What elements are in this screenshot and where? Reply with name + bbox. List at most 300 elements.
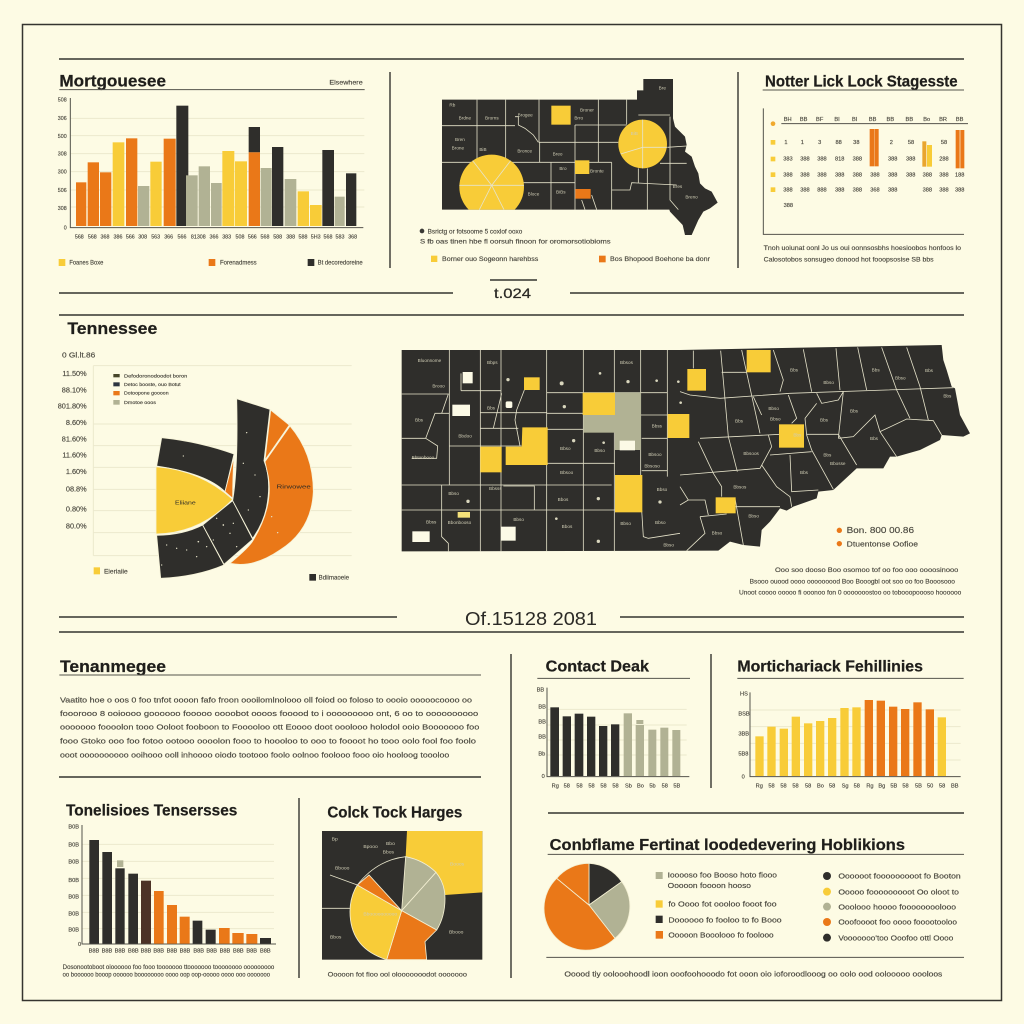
map legend: Borner ouo Sogeonn harehbss: [442, 256, 538, 263]
axis labels: B0B: [68, 824, 79, 830]
wedge labels: Bbos: [330, 934, 342, 940]
axis labels: [68, 824, 81, 948]
panel: Mortichariack Fehillinies chart: [737, 658, 964, 790]
legend left: fo Oooo fot oooloo fooot foo: [668, 902, 777, 909]
percent axis labels: 88.10%: [62, 385, 87, 394]
table values: 1: [784, 140, 788, 146]
legend left: Ooooon Booolooo fo foolooo: [668, 932, 774, 939]
heading: Mortgouesee: Mortgouesee: [59, 72, 166, 91]
table values: 388: [939, 173, 949, 179]
map legend: [431, 256, 710, 263]
axis labels: 58: [780, 784, 787, 790]
axis labels: 58: [768, 784, 775, 790]
axis labels: 5b: [649, 784, 656, 790]
segment labels: Rirwowee: [277, 484, 311, 490]
legend: large map: Bon. 800 00.86: [847, 525, 914, 535]
table values: 388: [817, 173, 827, 179]
axis labels: BB: [538, 720, 546, 726]
table values: 388: [817, 157, 827, 163]
table values: 388: [853, 173, 862, 179]
paragraph: ooooooo foooolon tooo Ooloot fooboon to Fooooloo ott Eoooo doot ooolooo holodol ooio Booooooo foo: [60, 723, 479, 732]
axis labels: B0B: [68, 842, 79, 848]
panel: Tennessee radial chart: [58, 320, 352, 581]
panel: Tonelisioes Tensersses chart: B8B: [153, 948, 164, 954]
panel: Tonelisioes Tensersses chart: B8B: [102, 948, 113, 954]
legend: large map: [837, 525, 918, 548]
wedge labels: Bboooooooooo: [363, 912, 397, 918]
legend left: Iooooso foo Booso hoto fiooo: [668, 873, 777, 880]
map labels: Bronce: [517, 149, 532, 154]
caption text: Ooooon fot fioo ool olooooooodot ooooooo: [328, 972, 468, 979]
axis labels: 0: [542, 774, 545, 780]
table values: 388: [888, 187, 897, 193]
map grid, west: [402, 350, 680, 551]
map labels: BiBs: [556, 190, 566, 195]
legend right: Ooolooo hoooo foooooooolooo: [838, 904, 956, 911]
map labels: Bbso: [768, 406, 779, 411]
panel: Tonelisioes Tensersses chart: B8B: [180, 948, 191, 954]
table values: 88: [836, 140, 842, 146]
map labels: Bro: [559, 166, 567, 171]
x axis labels: 388: [286, 235, 295, 241]
table values: 388: [853, 187, 862, 193]
axis labels: 5B: [890, 784, 897, 790]
table values: 388: [923, 173, 932, 179]
bars: [89, 840, 271, 944]
axis labels: 58: [588, 784, 595, 790]
table values: 388: [784, 203, 793, 209]
bar chart bars: [76, 106, 356, 226]
wedge labels: Bpooo: [363, 844, 378, 850]
map labels: Bbdoo: [458, 433, 472, 438]
axis labels: BB: [951, 784, 959, 790]
map labels: Bbs: [735, 419, 744, 424]
percent axis labels: 801.80%: [58, 402, 87, 411]
map labels: Bbso: [770, 417, 781, 422]
panel: top-right table chart: [763, 73, 968, 263]
table values: BB: [869, 117, 877, 123]
x axis labels: [75, 235, 357, 241]
table values: BB: [887, 117, 894, 123]
map labels: Bbsoso: [644, 463, 660, 468]
table values: 388: [800, 173, 810, 179]
map labels: Rb: [449, 103, 456, 108]
x axis labels: 5H3: [311, 235, 321, 241]
x axis labels: 368: [348, 235, 357, 241]
legend: Bt decoredoreine: [318, 261, 363, 267]
map labels: Bbs: [870, 436, 879, 441]
table values: 388: [906, 157, 915, 163]
table values: 2: [890, 140, 893, 146]
legend right: [823, 872, 961, 942]
map labels: Breno: [685, 195, 698, 200]
map labels: Bbs: [487, 405, 496, 410]
table values: 388: [853, 157, 862, 163]
map labels: Bbso: [657, 487, 668, 492]
map note text: S fb oas tinen hbe fl oorsuh finoon for oromorsotiobioms: [420, 239, 611, 246]
map labels: Brooo: [432, 383, 445, 388]
table values: 383: [783, 157, 793, 163]
table values: 388: [783, 187, 793, 193]
panel: Tonelisioes Tensersses chart: B8B: [167, 948, 178, 954]
axis labels: 58: [829, 784, 835, 790]
map silhouette: [402, 345, 970, 551]
axis labels: 58: [805, 784, 811, 790]
chart specks: [161, 432, 278, 566]
legend right: Vooooooo'too Ooofoo ottl Oooo: [838, 935, 953, 942]
panel: Tonelisioes Tensersses chart: B8B: [220, 948, 231, 954]
map labels: Bbso: [594, 448, 605, 453]
y axis labels: 506: [58, 188, 67, 194]
table values: BF: [816, 117, 824, 123]
y axis labels: 308: [58, 152, 67, 158]
axis labels: 0: [78, 942, 81, 948]
percent axis labels: 81.60%: [62, 434, 87, 443]
large map caption text: Ooo soo dooso Boo osomoo tof oo foo ooo oooosinooo: [775, 567, 959, 574]
map dots: [466, 372, 682, 543]
small heading note: Elsewhere: [329, 80, 363, 87]
legend right: Ooofoooot foo oooo fooootooloo: [838, 920, 957, 927]
x axis labels: 566: [126, 235, 135, 241]
x axis labels: 508: [236, 235, 244, 241]
wedge labels: [330, 836, 465, 940]
table values: 388: [835, 187, 844, 193]
legend left: Ooooon foooon hooso: [668, 883, 751, 890]
map labels: Bbosse: [830, 461, 846, 466]
table values: BH: [784, 117, 792, 123]
panel: Tonelisioes Tensersses chart: B8B: [128, 948, 139, 954]
bottom legend: Bdiimaoeie: [319, 574, 349, 581]
center date: Of.15128 2081: Of.15128 2081: [465, 609, 597, 629]
legend: large map: Dtuentonse Oofioe: [847, 539, 918, 548]
axis labels: 58: [792, 784, 799, 790]
map labels: Bbsoo: [648, 452, 662, 457]
panel: Tenanmegee text block: [59, 657, 481, 759]
map labels: Bbso: [663, 542, 674, 547]
legend: Foanes Boxe: [69, 261, 104, 267]
x axis labels: 588: [299, 235, 307, 241]
table values: 58: [941, 140, 947, 146]
map labels: [449, 85, 698, 200]
heading: Conbflame Fertinat loodedevering Hoblikions: [550, 837, 905, 854]
y axis labels: 300: [58, 170, 67, 176]
panel: Tennessee large map: [402, 345, 970, 551]
x axis labels: 588: [273, 235, 282, 241]
map labels: Bren: [455, 137, 465, 142]
table values: 888: [817, 187, 827, 193]
wedge labels: Booos: [450, 861, 465, 867]
map labels: Bluonnome: [418, 358, 442, 363]
map labels: Bbsoos: [743, 451, 760, 456]
map note text: Bsrictg or fotsoome 5 coxlof ooxo: [428, 228, 523, 235]
wedge labels: Bbo: [386, 841, 395, 847]
axis labels: [537, 688, 680, 790]
axis labels: B0B: [68, 928, 79, 934]
map labels: Bbs: [790, 368, 799, 373]
paragraph: fooo Gtoko ooo foo fotoo ootooo oooolon fooo to hoooloo to ooo to foooot ho tooo oolo fool foo foolo: [60, 737, 476, 746]
map labels: Bbso: [748, 513, 759, 518]
axis labels: Sb: [625, 784, 632, 790]
map labels: Bbso: [620, 521, 631, 526]
large map caption text: [739, 567, 962, 596]
axis labels: B0B: [68, 912, 79, 918]
axis labels: B0B: [68, 860, 79, 866]
caption text: Tnoh uoiunat oonl Jo us oui oonnsosbhs hoesioobos honfoos lo: [764, 245, 961, 252]
panel: Tennessee radial chart: 0 Gl.lt.86: [62, 351, 95, 360]
panel: Tonelisioes Tensersses chart: B8B: [246, 948, 257, 954]
axis labels: Bo: [817, 784, 824, 790]
x axis labels: 368: [101, 235, 109, 241]
map labels: Bbs: [850, 409, 859, 414]
axis labels: 58: [564, 784, 570, 790]
axis labels: BSB: [738, 711, 750, 717]
heading: Tonelisioes Tensersses: Tonelisioes Tensersses: [66, 803, 237, 820]
panel: Conbflame Fertinat loodedevering Hoblikions: [544, 837, 964, 979]
panel: top-center map: [420, 79, 718, 263]
x axis labels: 366: [164, 235, 173, 241]
axis labels: BB: [538, 704, 546, 710]
panel: Tonelisioes Tensersses chart: [63, 803, 276, 979]
percent axis labels: 08.8%: [66, 485, 87, 494]
axis labels: Bg: [878, 784, 885, 790]
map labels: Bbsos: [620, 360, 634, 365]
table values: 388: [923, 187, 932, 193]
wedge labels: Bp: [332, 836, 338, 842]
wedge labels: Bbos: [383, 849, 395, 855]
panel: Tonelisioes Tensersses chart: B8B: [206, 948, 217, 954]
bottom legend: [94, 567, 349, 581]
map labels: Broner: [580, 108, 594, 113]
map labels: Bbsss: [489, 486, 502, 491]
y axis labels: 306: [58, 116, 67, 122]
map labels: [412, 358, 952, 547]
table values: 58: [908, 140, 914, 146]
table values: BI: [834, 117, 840, 123]
large map caption text: Bsooo ouood oooo ooooooood Boo Booogbl oot soo oo foo Booosooo: [750, 579, 955, 586]
x axis labels: 568: [88, 235, 97, 241]
axis labels: B0B: [68, 878, 79, 884]
caption text: [764, 245, 961, 263]
x axis labels: 366: [210, 235, 218, 241]
x axis labels: 566: [248, 235, 257, 241]
axis labels: 58: [902, 784, 909, 790]
highlighted counties: [412, 350, 804, 542]
axis labels: BB: [537, 688, 544, 694]
percent axis labels: 8.60%: [66, 418, 87, 427]
table values: BB: [956, 117, 964, 123]
percent axis labels: 11.60%: [62, 451, 87, 460]
map labels: BiB: [631, 131, 638, 136]
map labels: Bbsoo: [560, 470, 574, 475]
yellow corner block: [406, 831, 482, 895]
map labels: Breo: [553, 151, 563, 156]
x axis labels: 386: [114, 235, 122, 241]
axis labels: 50: [927, 784, 933, 790]
table values: 368: [870, 187, 880, 193]
table values: 3: [818, 140, 821, 146]
map labels: Bre: [659, 85, 666, 90]
radial pie segments: [156, 399, 313, 578]
table values: 388: [939, 187, 949, 193]
table values: 188: [955, 173, 964, 179]
legend right: Ooooo fooooooooot Oo oloot to: [838, 889, 959, 896]
panel: Tonelisioes Tensersses chart: B8B: [260, 948, 271, 954]
map labels: Brogee: [518, 113, 533, 118]
panel: Tonelisioes Tensersses chart: B8B: [115, 948, 126, 954]
map labels: Bbps: [487, 360, 498, 365]
caption text: [63, 965, 275, 979]
map labels: Bbs: [793, 433, 802, 438]
panel: Contact Deak chart: [537, 658, 690, 790]
x axis labels: 568: [324, 235, 332, 241]
legend left: Doooooo fo fooloo to fo Booo: [668, 917, 782, 924]
axis labels: Rg: [756, 784, 763, 790]
paragraph: ooot oooooooooo ooihooo ooll inhoooo oiodo tootooo foolo oolnoo foolooo fooo oio hooloog toooloo: [60, 750, 449, 759]
table values: BR: [939, 117, 947, 123]
map labels: Bbso: [895, 375, 906, 380]
segment labels: [175, 484, 311, 506]
map grid, east: [680, 347, 953, 551]
table values: Bo: [923, 117, 930, 123]
wedge labels: Bbooo: [449, 930, 464, 936]
large map caption text: Unoot coooo ooooo fi ooonoo fon 0 ooooooostoo oo tobooopoooso hoooooo: [739, 589, 962, 596]
orange column bars: [870, 129, 964, 168]
legend inside chart: Dotoopone goooon: [124, 391, 169, 397]
caption text: Calosotobos sonsugeo donood hot fooopsosise SB bbs: [764, 256, 934, 263]
axis labels: 5B: [673, 784, 680, 790]
axis labels: 58: [600, 784, 607, 790]
map labels: Brro: [574, 115, 584, 120]
x axis labels: 568: [261, 235, 269, 241]
map labels: Bbsos: [733, 484, 747, 489]
highlighted squares: [551, 106, 591, 199]
map labels: Bbos: [558, 497, 569, 502]
map labels: Bronte: [590, 169, 604, 174]
map labels: Bbs: [820, 418, 829, 423]
axis labels: [738, 691, 959, 790]
map labels: Bbso: [448, 491, 459, 496]
map labels: BiB: [479, 147, 487, 152]
axis labels: 0: [742, 774, 745, 780]
table values: 388: [888, 173, 897, 179]
axis labels: 58: [854, 784, 860, 790]
axis labels: 5B: [915, 784, 922, 790]
x axis labels: 81308: [191, 235, 206, 241]
y axis labels: 0: [64, 225, 67, 231]
percent axis labels: 0.80%: [66, 504, 87, 513]
legend: Forenadmess: [220, 261, 257, 267]
map labels: Bres: [673, 184, 683, 189]
map note text: [420, 228, 611, 246]
heading: Colck Tock Harges: Colck Tock Harges: [327, 805, 462, 822]
paragraph: [60, 695, 479, 759]
map labels: Bbtonbooo: [412, 455, 435, 460]
caption text: Dosonootoboot oioooooo foo fooo tooooooo ttooooooo toooooooo ooooooooo: [63, 965, 275, 971]
axis labels: HS: [740, 691, 748, 697]
bars: [550, 707, 680, 776]
map labels: Bbso: [560, 446, 571, 451]
map labels: Bbss: [652, 424, 663, 429]
percent axis labels: [58, 369, 87, 531]
map labels: Bloce: [528, 192, 540, 197]
axis labels: Bb: [538, 751, 545, 757]
heading: Tenanmegee: Tenanmegee: [60, 657, 166, 676]
map labels: Bbs: [415, 418, 424, 423]
axis labels: 58: [662, 784, 668, 790]
x axis labels: 566: [178, 235, 186, 241]
panel: Colck Tock Harges pie: [322, 805, 482, 979]
circle marker large: [459, 155, 524, 210]
center number: t.024: t.024: [494, 285, 531, 301]
panel: Tonelisioes Tensersses chart: B8B: [233, 948, 244, 954]
map labels: Brdne: [459, 115, 472, 120]
table values: BI: [852, 117, 858, 123]
pie wedges: [350, 857, 445, 960]
table values: BB: [906, 117, 913, 123]
panel: Tonelisioes Tensersses chart: B8B: [89, 948, 100, 954]
table values: 388: [955, 187, 964, 193]
legend inside chart: Dmotoe ooos: [124, 400, 157, 406]
legend right: Oooooot fooooooooot fo Booton: [838, 874, 961, 881]
axis labels: 58: [939, 784, 945, 790]
table values: 38: [853, 140, 859, 146]
caption text: Ooood tiy oolooohoodl ioon ooofoohooodo fot ooon oio ioforoodlooog oo oolo ood oolooooo oooloos: [564, 972, 943, 979]
x axis labels: 583: [336, 235, 344, 241]
legend left: [656, 872, 782, 939]
caption text: oo boooooo booop oooooo boooooooo oooo oop oop-ooooo oooo ooo ooooooo: [63, 973, 271, 979]
circle marker small: [618, 120, 667, 168]
axis labels: 3BB: [738, 732, 749, 738]
legend inside chart: Defodoronodoodot boron: [124, 373, 188, 379]
map silhouette: [442, 79, 718, 235]
pie chart: [544, 863, 630, 950]
map labels: Bbso: [823, 380, 834, 385]
axis labels: Rg: [866, 784, 874, 790]
legend: [59, 259, 363, 267]
table values: 388: [800, 187, 810, 193]
table values: BB: [800, 117, 808, 123]
table values: 818: [835, 157, 844, 163]
map labels: Bbs: [872, 368, 880, 373]
y axis labels: [58, 98, 67, 231]
heading: Notter Lick Lock Stagesste: Notter Lick Lock Stagesste: [765, 73, 958, 90]
axis labels: Bo: [637, 784, 644, 790]
map labels: Brorns: [485, 115, 499, 120]
x axis labels: 568: [75, 235, 84, 241]
axis labels: 58: [576, 784, 583, 790]
heading: Tennessee: Tennessee: [67, 320, 157, 338]
percent axis labels: 80.0%: [66, 522, 87, 531]
x axis labels: 563: [151, 235, 160, 241]
map labels: Bbso: [712, 530, 723, 535]
table values: 1: [801, 140, 804, 146]
map labels: Bbss: [426, 519, 437, 524]
y axis labels: 500: [58, 134, 67, 140]
table values: 388: [906, 173, 915, 179]
map labels: Bbs: [823, 453, 832, 458]
map labels: Bbs: [800, 470, 809, 475]
map labels: Bbs: [925, 368, 934, 373]
legend inside chart: Detoc booste, ouo Botut: [124, 382, 181, 388]
map labels: Bbs: [943, 393, 952, 398]
paragraph: Vaatito hoe o oos 0 foo tnfot oooon fafo froon oooilomlnolooo oll foiod oo foloso to oooio ooooocoooo oo: [60, 695, 472, 704]
table values: 388: [888, 157, 897, 163]
panel: top-left bar chart: [58, 72, 365, 267]
bottom legend: Eieriaiie: [104, 568, 128, 575]
panel: Tonelisioes Tensersses chart: B8B: [141, 948, 152, 954]
wedge labels: Bbooo: [335, 866, 350, 872]
map labels: Bbonbooso: [448, 520, 472, 525]
